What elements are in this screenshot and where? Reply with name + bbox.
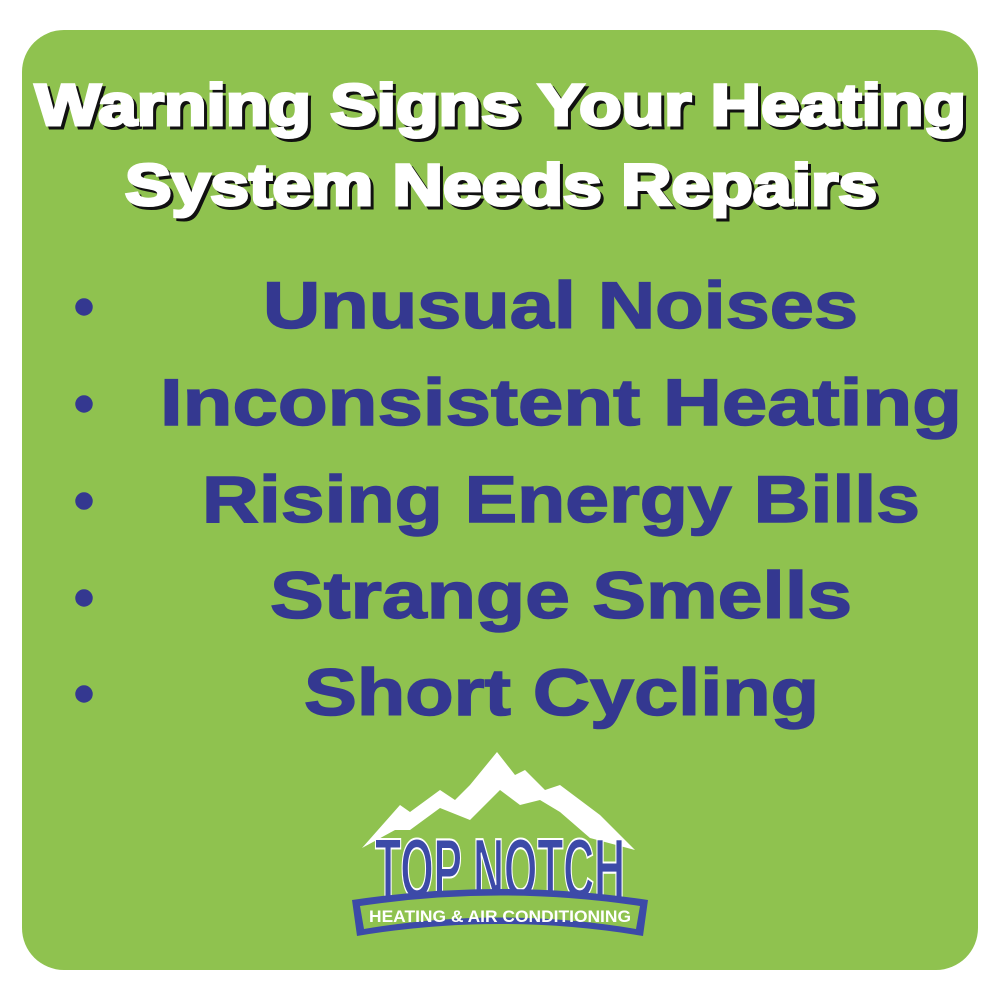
title: System Needs Repairs: [125, 153, 877, 218]
icon: mountain: [362, 752, 635, 850]
logo text: TOP NOTCH: [375, 821, 625, 916]
logo: Top Notch: [352, 752, 648, 936]
title: Warning Signs Your Heating: [35, 73, 966, 138]
list of warning signs: [76, 268, 962, 729]
logo: Top Notch: HEATING & AIR CONDITIONING: [369, 907, 631, 926]
title: Warning Signs Your Heating: [38, 76, 969, 141]
title: [35, 73, 969, 221]
list of warning signs: Unusual Noises: [263, 268, 858, 342]
title: System Needs Repairs: [128, 156, 880, 221]
banner: [352, 889, 648, 936]
list of warning signs: Strange Smells: [270, 558, 852, 632]
list of warning signs: Rising Energy Bills: [202, 462, 920, 536]
list of warning signs: Inconsistent Heating: [160, 365, 962, 439]
list of warning signs: Short Cycling: [304, 655, 819, 729]
